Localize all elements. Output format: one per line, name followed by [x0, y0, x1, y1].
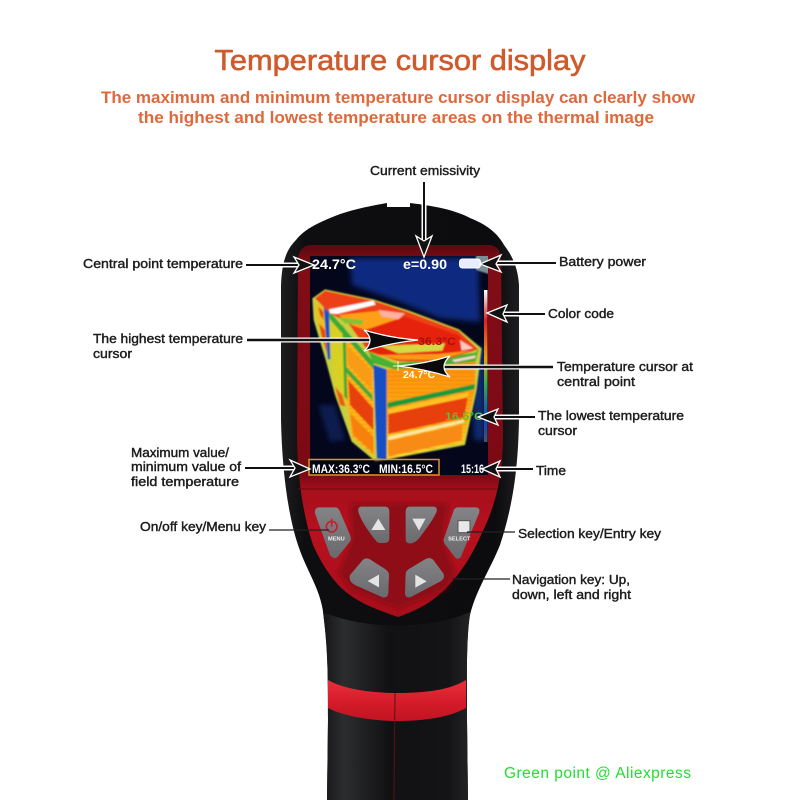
red front face — [297, 245, 503, 617]
handle grip — [323, 612, 470, 800]
arrow: lowest temperature cursor — [478, 409, 535, 425]
front face red section — [388, 393, 468, 434]
central blue stripe — [373, 365, 387, 460]
label: on/off key: On/off key/Menu key — [140, 520, 267, 534]
leader line: on/off key — [269, 529, 329, 531]
front face — [387, 361, 476, 459]
subtitle: the highest and lowest temperature areas on the thermal image — [138, 108, 654, 127]
label: lowest temperature cursor — [538, 409, 684, 438]
label: current emissivity: Current emissivity — [370, 164, 481, 178]
leader line: selection key — [467, 531, 515, 533]
red handle band — [328, 680, 466, 721]
front face green band — [388, 384, 475, 408]
key: select: SELECT — [448, 537, 471, 543]
color scale bar — [484, 290, 488, 442]
arrow: current emissivity — [416, 182, 432, 257]
top face — [315, 291, 478, 362]
subtitle: The maximum and minimum temperature cursor display can clearly show — [101, 88, 696, 107]
label: lowest temperature cursor: The lowest temperature — [538, 409, 684, 423]
label: selection key: Selection key/Entry key — [518, 527, 662, 541]
label: maximum and minimum field temperature: minimum value of — [131, 460, 242, 474]
max/min box — [309, 460, 439, 475]
label: central point temperature: Central point temperature — [83, 257, 243, 271]
cursor crosshair — [393, 361, 398, 371]
label: maximum and minimum field temperature — [131, 446, 242, 489]
screen readouts: 36.3°C — [418, 336, 456, 348]
bezel seam line — [298, 488, 498, 490]
infographic canvas — [84, 48, 695, 800]
label: lowest temperature cursor: cursor — [538, 424, 577, 438]
arrow: battery power — [480, 255, 556, 272]
middle left column — [330, 313, 348, 405]
screen readouts — [309, 256, 484, 476]
label: battery power: Battery power — [559, 255, 646, 269]
label: color code: Color code — [548, 307, 614, 321]
screen readouts: 15:16 — [461, 464, 484, 476]
front face lower section — [388, 425, 462, 457]
thermal box — [312, 289, 482, 462]
label: highest temperature cursor: The highest temperature — [93, 332, 243, 346]
label: temperature cursor at central point: central point — [557, 375, 636, 389]
arrow: highest temperature cursor — [247, 330, 418, 351]
top right glare — [475, 256, 488, 275]
arrow: maximum and minimum field temperature — [245, 460, 310, 477]
label: maximum and minimum field temperature: Maximum value/ — [131, 446, 230, 460]
thermal screen — [310, 250, 502, 475]
screen readouts: 16.5°C — [445, 411, 483, 423]
label: maximum and minimum field temperature: field temperature — [131, 475, 239, 489]
label: time: Time — [536, 464, 566, 478]
arrow: temperature cursor at central point — [398, 356, 553, 377]
leader line: navigation key — [452, 578, 510, 580]
device body — [281, 203, 519, 800]
arrow: central point temperature — [246, 257, 314, 273]
title: Temperature cursor display — [214, 45, 586, 77]
thermal camera device — [281, 203, 519, 800]
top face orange strip — [338, 311, 407, 330]
handle seam — [394, 693, 395, 800]
top face red area — [366, 316, 472, 355]
key: menu: MENU — [328, 537, 345, 543]
key well — [338, 503, 455, 608]
left face green bands — [328, 310, 373, 369]
screen readouts: MAX:36.3°C — [312, 464, 370, 476]
box silhouette outline — [312, 289, 482, 462]
label: temperature cursor at central point — [557, 360, 694, 389]
battery icon — [460, 259, 480, 268]
key: left — [350, 558, 389, 597]
screen readouts: e=0.90 — [403, 256, 447, 272]
label: navigation key: Navigation key: Up, — [512, 573, 630, 587]
screen readouts: MIN:16.5°C — [379, 464, 433, 476]
label: highest temperature cursor: cursor — [93, 347, 132, 361]
watermark: Green point @ Aliexpress — [504, 765, 691, 782]
label: navigation key: down, left and right — [512, 588, 632, 602]
background blue regions — [318, 258, 485, 442]
key: down — [406, 507, 437, 543]
subtitle — [101, 88, 696, 127]
control keys — [315, 507, 479, 597]
key: up — [358, 507, 389, 543]
far left column — [314, 302, 326, 338]
key: select — [444, 507, 479, 559]
arrow: color code — [487, 305, 545, 322]
left blue stripe — [324, 307, 330, 359]
screen readouts: 24.7°C — [403, 369, 435, 381]
front face pale band — [388, 419, 464, 440]
left face orange sections — [348, 380, 373, 430]
label: temperature cursor at central point: Temperature cursor at — [557, 360, 694, 374]
green rim under top — [368, 348, 479, 369]
key: right — [405, 558, 444, 597]
arrow: time — [482, 461, 533, 477]
label: highest temperature cursor — [93, 332, 243, 361]
main left face — [345, 335, 374, 457]
key: menu — [315, 507, 351, 558]
label: navigation key — [512, 573, 632, 602]
top face yellow strip — [380, 343, 445, 353]
screen readouts: 24.7°C — [312, 256, 356, 272]
hot spots — [329, 301, 376, 314]
